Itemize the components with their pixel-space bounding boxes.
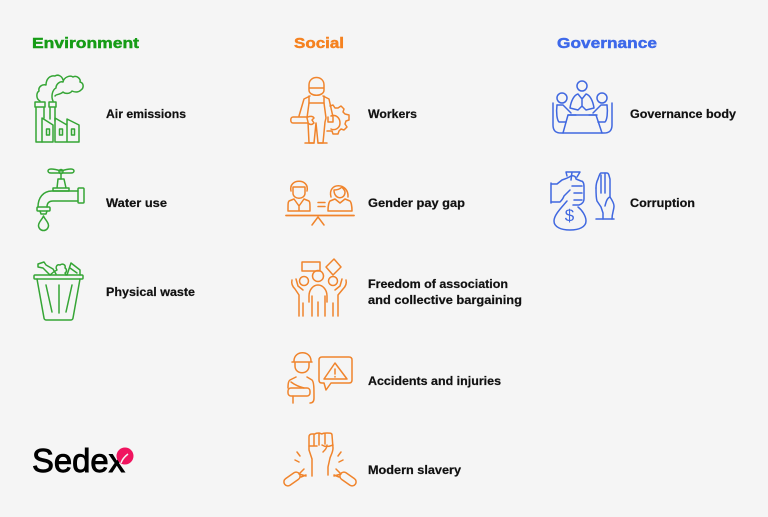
label: Accidents and injuries: Accidents and injuries	[368, 376, 501, 388]
icon: water tap	[37, 169, 84, 230]
label: Freedom of association and collective bargaining	[368, 279, 522, 307]
label: Workers: Workers	[368, 109, 417, 121]
logo: Sedex: Sedex	[32, 442, 125, 479]
icon: injured worker with warning bubble	[288, 353, 352, 403]
icon: gender pay balance	[286, 181, 354, 225]
label: Corruption: Corruption	[630, 198, 695, 210]
icon: money bag and refusing hand: $	[565, 206, 575, 225]
label: Freedom of association and collective bargaining: Freedom of association	[368, 279, 508, 291]
icon: money bag and refusing hand	[551, 172, 614, 230]
label: Water use: Water use	[106, 198, 167, 210]
icon: factory	[35, 75, 83, 142]
label: Air emissions: Air emissions	[106, 109, 186, 121]
icon: fist breaking chain	[282, 433, 358, 487]
heading: Governance: Governance	[557, 35, 657, 52]
icon: waste bin	[34, 262, 83, 320]
label: Gender pay gap: Gender pay gap	[368, 198, 465, 210]
label: Modern slavery: Modern slavery	[368, 465, 462, 477]
icon: worker with wrench and gear	[291, 78, 349, 143]
heading: Environment: Environment	[32, 35, 139, 52]
label: Freedom of association and collective bargaining: and collective bargaining	[368, 295, 522, 307]
label: Physical waste: Physical waste	[106, 287, 195, 299]
label: Governance body: Governance body	[630, 109, 737, 121]
icon: protest group with placards	[292, 259, 346, 316]
heading: Social: Social	[294, 35, 344, 52]
icon: governance meeting table	[553, 81, 612, 133]
